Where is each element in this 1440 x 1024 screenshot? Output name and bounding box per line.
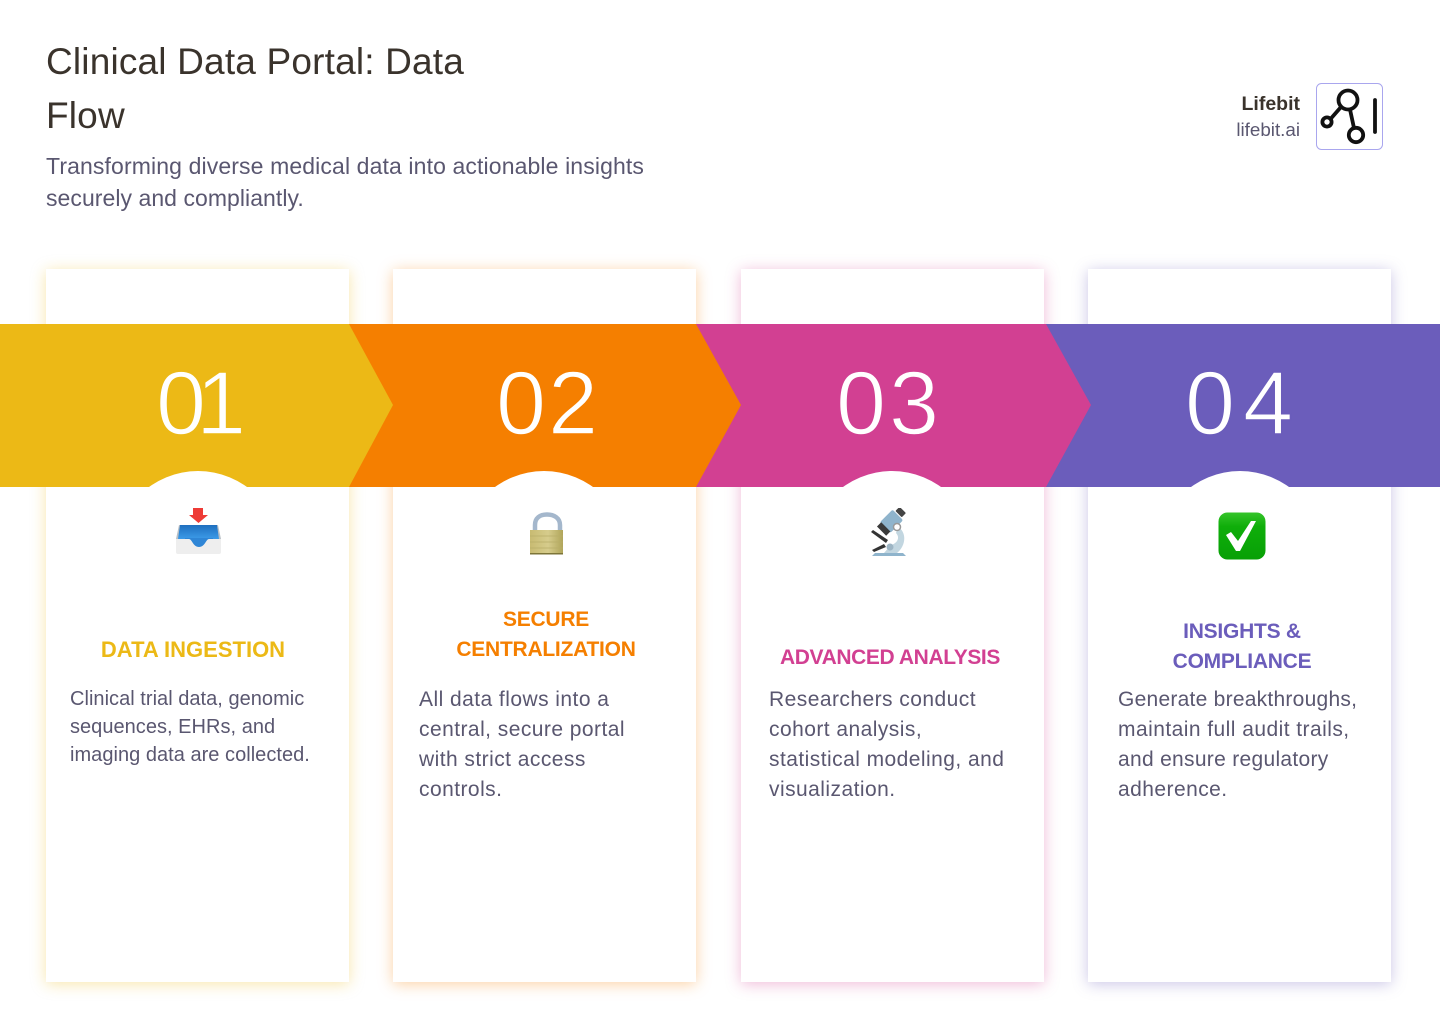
step number 04: 04 xyxy=(1185,354,1301,454)
header title: Flow xyxy=(46,95,125,136)
card 3 text: cohort analysis, xyxy=(769,718,922,741)
yellow chevron xyxy=(0,324,393,487)
card 4 text: and ensure regulatory xyxy=(1118,748,1329,771)
card 4 text: Generate breakthroughs, xyxy=(1118,688,1357,711)
icon: padlock xyxy=(530,512,563,554)
header subtitle xyxy=(46,153,644,211)
step number 03: 03 xyxy=(836,354,942,454)
card 2 text xyxy=(419,688,625,801)
card 4 text xyxy=(1118,688,1357,801)
card 2 text: All data flows into a xyxy=(419,688,609,711)
panel: card 2 xyxy=(393,269,696,982)
card 4 heading xyxy=(1173,620,1311,673)
icon: inbox tray xyxy=(176,508,221,554)
card 1 text: imaging data are collected. xyxy=(70,744,310,766)
panel: card 1 xyxy=(46,269,349,982)
card 2 text: controls. xyxy=(419,778,502,801)
icon: microscope xyxy=(871,508,906,556)
card 3 heading: ADVANCED ANALYSIS xyxy=(780,646,1000,669)
step number 01: 01 xyxy=(156,354,236,454)
card 4 text: adherence. xyxy=(1118,778,1228,801)
header subtitle: securely and compliantly. xyxy=(46,185,304,211)
brand name: Lifebit xyxy=(1242,93,1300,115)
card 3 text: Researchers conduct xyxy=(769,688,976,711)
orange chevron xyxy=(349,324,741,487)
card 4 text: maintain full audit trails, xyxy=(1118,718,1350,741)
panel: card 4 xyxy=(1088,269,1391,982)
card 4 heading: COMPLIANCE xyxy=(1173,650,1311,673)
header title: Clinical Data Portal: Data xyxy=(46,41,464,82)
card 1 text: Clinical trial data, genomic xyxy=(70,688,304,710)
brand url: lifebit.ai xyxy=(1236,119,1300,140)
icon: check mark xyxy=(1218,512,1266,560)
chevron band xyxy=(0,324,1440,487)
header subtitle: Transforming diverse medical data into actionable insights xyxy=(46,153,644,179)
card 2 heading xyxy=(456,608,636,661)
card 3 text: visualization. xyxy=(769,778,896,801)
card 1 heading: DATA INGESTION xyxy=(101,637,285,662)
icon notches xyxy=(115,471,1323,637)
header title xyxy=(46,41,464,136)
card 2 text: central, secure portal xyxy=(419,718,625,741)
brand block xyxy=(1236,83,1383,150)
card 4 heading: INSIGHTS & xyxy=(1183,620,1301,643)
step number 02: 02 xyxy=(496,354,600,454)
card 2 heading: CENTRALIZATION xyxy=(456,638,636,661)
panel: card 3 xyxy=(741,269,1044,982)
card 2 heading: SECURE xyxy=(503,608,589,631)
purple chevron xyxy=(1046,324,1440,487)
pink chevron xyxy=(696,324,1091,487)
card 1 text xyxy=(70,688,310,766)
card 3 text xyxy=(769,688,1004,801)
card 3 text: statistical modeling, and xyxy=(769,748,1004,771)
icon: lifebit logo xyxy=(1316,83,1383,150)
card 2 text: with strict access xyxy=(419,748,586,771)
card 1 text: sequences, EHRs, and xyxy=(70,716,275,738)
